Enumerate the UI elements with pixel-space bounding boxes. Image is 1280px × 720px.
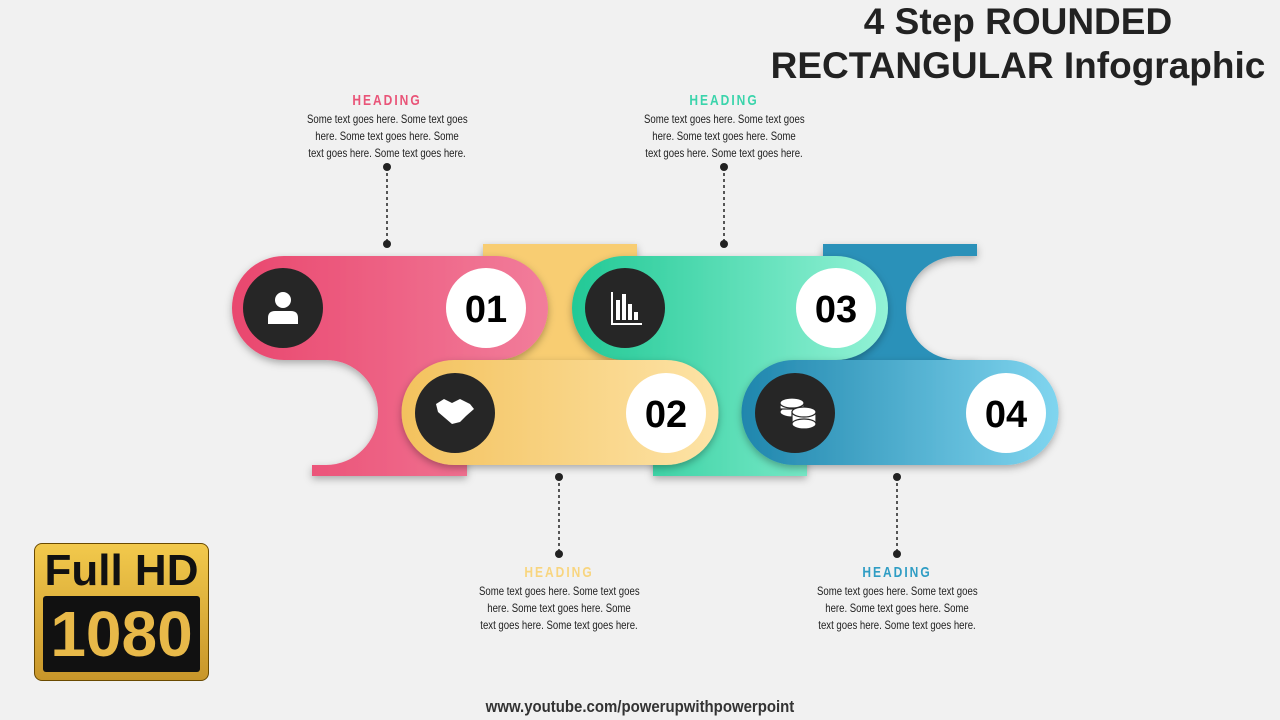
- text block 4: HEADING: [862, 564, 932, 581]
- icon: bar chart: [611, 292, 642, 325]
- text block 3: here. Some text goes here. Some: [652, 129, 796, 143]
- Full HD badge: 1080: [50, 598, 193, 670]
- numbers: 03: [815, 289, 857, 331]
- text block 3: text goes here. Some text goes here.: [645, 146, 803, 160]
- icon: person: [268, 292, 298, 324]
- title: [771, 1, 1265, 86]
- text block 1: text goes here. Some text goes here.: [308, 146, 466, 160]
- text block 2: HEADING: [524, 564, 594, 581]
- dotted connector lines: [383, 163, 901, 558]
- text block 3: [644, 92, 805, 160]
- text block 1: here. Some text goes here. Some: [315, 129, 459, 143]
- text block 2: [479, 564, 640, 632]
- text block 4: [817, 564, 978, 632]
- yellow top block: [483, 244, 637, 374]
- footer url: www.youtube.com/powerupwithpowerpoint: [486, 697, 794, 716]
- text block 1: HEADING: [352, 92, 422, 109]
- text block 4: here. Some text goes here. Some: [825, 601, 969, 615]
- blue top block: [823, 244, 977, 380]
- text block 2: text goes here. Some text goes here.: [480, 618, 638, 632]
- Full HD badge: Full HD: [44, 546, 198, 595]
- icon: handshake: [436, 399, 474, 424]
- yellow pill: [402, 360, 718, 465]
- blue pill: [742, 360, 1058, 465]
- text block 1: [307, 92, 468, 160]
- text block 3: Some text goes here. Some text goes: [644, 112, 805, 126]
- text block 3: HEADING: [689, 92, 759, 109]
- number circles: [446, 268, 1046, 453]
- title: 4 Step ROUNDED: [864, 1, 1172, 42]
- numbers: [465, 289, 1027, 436]
- numbers: 04: [985, 394, 1027, 436]
- numbers: 01: [465, 289, 507, 331]
- pink shape: [232, 256, 548, 476]
- text block 2: here. Some text goes here. Some: [487, 601, 631, 615]
- text block 4: Some text goes here. Some text goes: [817, 584, 978, 598]
- icon circles: [243, 268, 835, 453]
- numbers: 02: [645, 394, 687, 436]
- text block 2: Some text goes here. Some text goes: [479, 584, 640, 598]
- text block 1: Some text goes here. Some text goes: [307, 112, 468, 126]
- Full HD badge: [34, 543, 209, 681]
- title: RECTANGULAR Infographic: [771, 45, 1265, 86]
- green shape: [572, 256, 888, 476]
- icon: coins: [780, 398, 816, 429]
- text block 4: text goes here. Some text goes here.: [818, 618, 976, 632]
